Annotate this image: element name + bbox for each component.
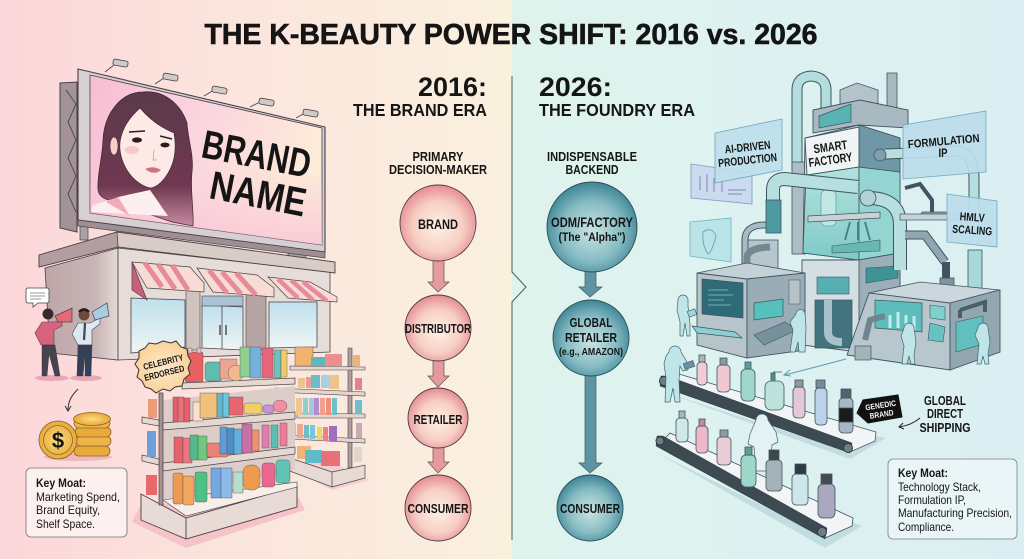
node: global retailer — [553, 300, 629, 376]
billboard text — [198, 123, 315, 225]
panel: 2026 heading — [539, 72, 695, 120]
floating panel: HMLV scaling — [947, 194, 997, 247]
right machine — [847, 282, 1000, 370]
billboard text: BRAND — [198, 123, 315, 187]
sign: smart factory: SMART — [813, 138, 849, 156]
node: ODM factory: ODM/FACTORY — [551, 215, 633, 230]
node: global retailer: RETAILER — [565, 330, 617, 345]
badge: celebrity endorsed — [135, 341, 191, 393]
floating panel: formulation IP: IP — [938, 148, 948, 160]
key moat box: 2016: Marketing Spend, — [36, 490, 120, 504]
shelf products: top — [185, 347, 287, 382]
key moat box: 2016: Brand Equity, — [36, 503, 100, 517]
background: 2016 side — [0, 0, 512, 559]
arrow: retailer to consumer — [579, 374, 602, 473]
worker with tablet — [664, 346, 695, 402]
label: global direct shipping: SHIPPING — [920, 420, 970, 435]
billboard screen — [90, 75, 322, 245]
walkway — [900, 214, 970, 220]
factory workers — [677, 295, 990, 364]
key moat box: 2026: Formulation IP, — [898, 493, 966, 507]
key moat box: 2016: Key Moat: — [36, 476, 86, 490]
node: retailer — [408, 388, 468, 448]
tag: generic brand: GENEDIC — [865, 399, 897, 412]
arrow: factory to retailer — [579, 270, 602, 297]
node: ODM factory — [547, 182, 637, 272]
store windows — [131, 286, 317, 353]
panel: 2026 heading: THE FOUNDRY ERA — [539, 100, 695, 120]
floating panel: AI-driven production: AI-DRIVEN — [724, 140, 771, 156]
node: global retailer: GLOBAL — [570, 315, 613, 330]
node: distributor: DISTRIBUTOR — [405, 321, 471, 336]
billboard portrait — [92, 92, 193, 226]
panel: 2026 illustration — [656, 73, 1017, 548]
conveyor belt: lower — [656, 433, 862, 548]
node: brand: BRAND — [418, 217, 458, 232]
label: indispensable backend: INDISPENSABLE — [547, 149, 637, 164]
panel: 2016 heading: 2016: — [418, 72, 487, 102]
arrow: distributor to retailer — [428, 360, 449, 387]
title: THE K-BEAUTY POWER SHIFT: 2016 vs. 2026 — [204, 19, 818, 51]
shelf products: third row — [174, 423, 287, 463]
panel: 2016 illustration — [26, 59, 370, 548]
key moat box: 2016 — [26, 468, 127, 537]
pipe joints — [766, 149, 982, 290]
node: consumer: CONSUMER — [560, 501, 620, 516]
badge: celebrity endorsed: ERDORSED — [143, 363, 186, 383]
key moat box: 2026: Technology Stack, — [898, 480, 981, 494]
bottles: upper belt — [697, 355, 853, 433]
key moat box: 2026 — [888, 459, 1017, 539]
chimney and back pipes — [792, 73, 897, 254]
icon: coins: $ — [52, 428, 64, 453]
key moat box: 2026: Key Moat: — [898, 466, 948, 480]
sign: smart factory: FACTORY — [808, 150, 854, 170]
arrow: shipping — [899, 418, 920, 429]
arrow to coins — [65, 389, 78, 411]
node: consumer: CONSUMER — [408, 501, 469, 516]
node: consumer — [557, 475, 623, 541]
key moat box: 2016: Shelf Space. — [36, 517, 95, 531]
factory tower — [792, 73, 908, 352]
floating panel: formulation IP — [903, 111, 986, 179]
label: global direct shipping: DIRECT — [927, 406, 963, 421]
flow chart: 2016 chain — [389, 149, 488, 541]
panel: 2016 heading: THE BRAND ERA — [353, 100, 487, 120]
arrow: retailer to consumer — [428, 447, 449, 473]
floating panel: HMLV scaling: HMLV — [959, 211, 985, 225]
label: primary decision-maker — [389, 149, 488, 177]
arrow: factory to belt — [784, 359, 846, 376]
sign: smart factory — [805, 127, 859, 175]
label: indispensable backend: BACKEND — [566, 162, 618, 177]
bottles: lower belt — [676, 411, 835, 518]
label: primary decision-maker: PRIMARY — [412, 149, 464, 164]
key moat box: 2026: Compliance. — [898, 520, 954, 534]
robot arms — [905, 184, 954, 290]
arrow: brand to distributor — [428, 260, 449, 292]
floating panel: formulation IP: FORMULATION — [907, 133, 980, 151]
shelf products: bottom row — [173, 460, 290, 505]
pipes — [745, 151, 974, 272]
speech bubble — [26, 288, 49, 307]
center divider with chevron — [512, 76, 526, 540]
billboard lamps — [105, 59, 318, 118]
label: indispensable backend — [547, 149, 637, 177]
label: global direct shipping: GLOBAL — [924, 393, 966, 408]
node: brand — [400, 185, 476, 261]
main shelf unit — [132, 347, 305, 548]
panel: 2016 heading — [353, 72, 487, 120]
tag: generic brand: BRAND — [869, 408, 894, 421]
panel: 2026 heading: 2026: — [539, 72, 612, 102]
node: global retailer: (e.g., AMAZON) — [559, 346, 623, 358]
label: primary decision-maker: DECISION-MAKER — [389, 162, 488, 177]
floating panel: diagnostic screen — [690, 218, 731, 262]
tower base — [802, 253, 900, 352]
flow chart: 2026 chain — [547, 149, 637, 541]
label: global direct shipping — [920, 393, 970, 435]
floating panel: AI-driven production — [691, 119, 782, 204]
billboard — [60, 59, 325, 258]
left machine — [692, 240, 805, 358]
tag: generic brand — [857, 395, 902, 423]
awnings — [132, 262, 337, 302]
node: consumer — [405, 475, 471, 541]
floating panel: AI-driven production: PRODUCTION — [718, 152, 778, 170]
node: ODM factory: (The "Alpha") — [558, 230, 626, 244]
node: retailer: RETAILER — [414, 412, 463, 427]
shelf products: second row — [173, 393, 287, 422]
icon: coins — [39, 412, 112, 461]
floating panel: HMLV scaling: SCALING — [952, 224, 993, 238]
billboard text: NAME — [206, 164, 310, 225]
node: distributor — [405, 295, 471, 361]
badge: celebrity endorsed: CELEBRITY — [142, 352, 184, 372]
right shelf unit — [275, 347, 370, 490]
glass chamber — [803, 125, 900, 260]
conveyor belt: upper — [660, 372, 886, 459]
background: 2026 side — [512, 0, 1024, 559]
storefront — [39, 232, 337, 360]
people with megaphones — [35, 303, 109, 381]
worker inspecting — [748, 414, 778, 471]
